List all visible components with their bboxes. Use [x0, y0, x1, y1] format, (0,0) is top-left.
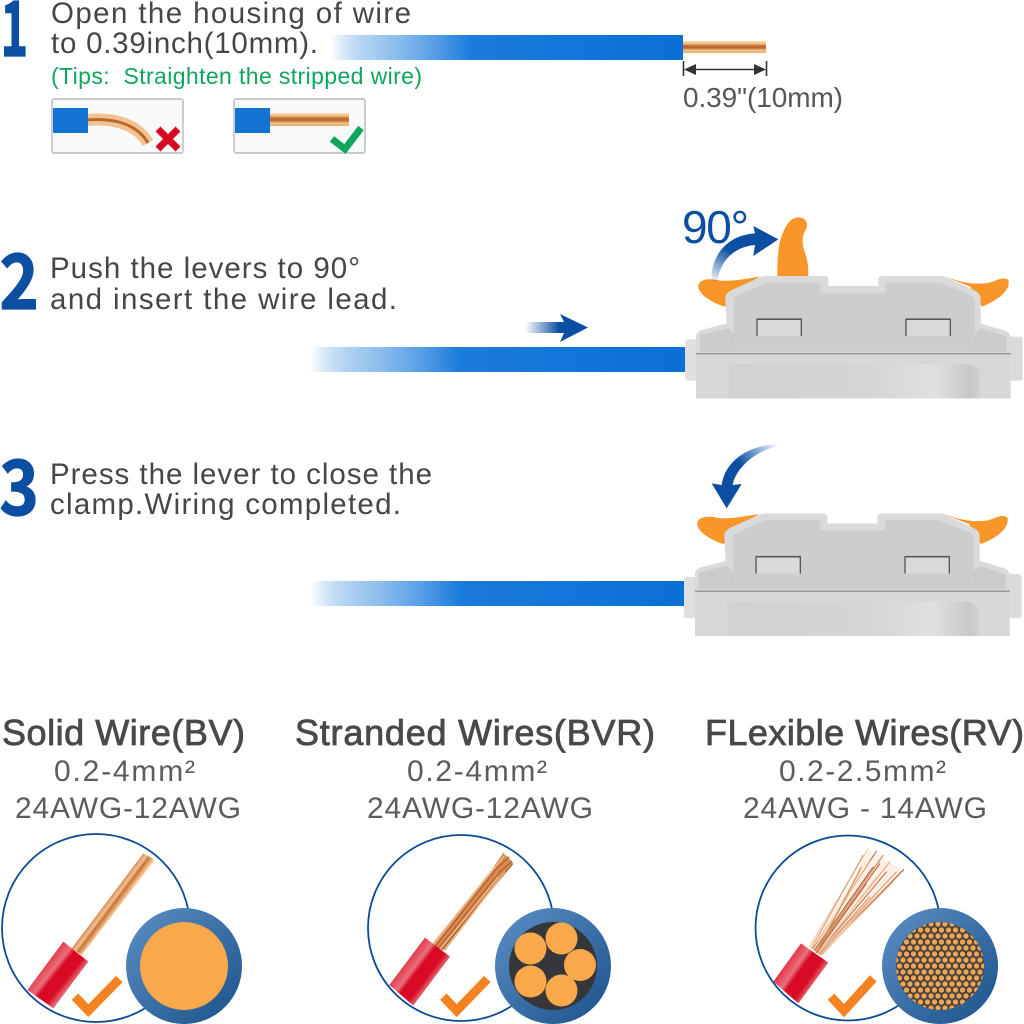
- step 2: [0, 201, 1023, 398]
- step 1 instruction text: to 0.39inch(10mm).: [51, 27, 318, 60]
- step 3 instruction text: [50, 458, 432, 521]
- circle: solid wire illustration: [2, 834, 242, 1024]
- column: stranded wires: [295, 712, 655, 1024]
- spec: stranded wires: [367, 755, 593, 825]
- spec: solid wire: [15, 755, 241, 825]
- column: flexible wires: [705, 712, 1024, 1024]
- heading: flexible wires: FLexible Wires(RV): [705, 712, 1024, 753]
- step number 3: 3: [0, 427, 39, 537]
- connector closed: [684, 513, 1022, 636]
- spec: solid wire: 24AWG-12AWG: [15, 792, 241, 825]
- step 1: [0, 0, 843, 153]
- step number 2: 2: [0, 221, 39, 331]
- stripped blue wire: [330, 35, 766, 60]
- insertion arrow: [525, 314, 588, 342]
- spec: solid wire: 0.2-4mm²: [54, 755, 195, 788]
- tip box: straight wire correct: [234, 99, 365, 153]
- spec: stranded wires: 0.2-4mm²: [407, 755, 547, 788]
- step 2 instruction text: [50, 252, 397, 316]
- circle: stranded wire illustration: [368, 835, 611, 1024]
- column: solid wire: [2, 712, 245, 1024]
- tip text: (Tips: Straighten the stripped wire): [51, 63, 422, 89]
- dimension arrow: [684, 61, 766, 76]
- spec: stranded wires: 24AWG-12AWG: [367, 792, 593, 825]
- blue wire clamped: [310, 581, 685, 606]
- spec: flexible wires: 0.2-2.5mm²: [779, 755, 946, 788]
- spec: flexible wires: [743, 755, 987, 825]
- step 3 instruction text: clamp.Wiring completed.: [50, 488, 401, 521]
- heading: solid wire: Solid Wire(BV): [2, 712, 245, 753]
- closing arrow: [712, 444, 777, 508]
- heading: stranded wires: Stranded Wires(BVR): [295, 712, 655, 753]
- step 2 instruction text: Push the levers to 90°: [50, 252, 360, 285]
- spec: flexible wires: 24AWG - 14AWG: [743, 792, 987, 825]
- dimension label: 0.39"(10mm): [683, 82, 843, 113]
- circle: flexible wire illustration: [756, 836, 998, 1024]
- connector open: [685, 217, 1023, 398]
- 90 degree label: 90°: [682, 201, 749, 253]
- tip box: bent wire wrong: [52, 99, 183, 153]
- blue wire inserted: [310, 347, 685, 372]
- step 3: [0, 427, 1022, 636]
- step 3 instruction text: Press the lever to close the: [50, 458, 432, 491]
- rotation arrow: [712, 226, 778, 282]
- step 1 instruction text: [51, 0, 411, 60]
- step 2 instruction text: and insert the wire lead.: [50, 283, 397, 316]
